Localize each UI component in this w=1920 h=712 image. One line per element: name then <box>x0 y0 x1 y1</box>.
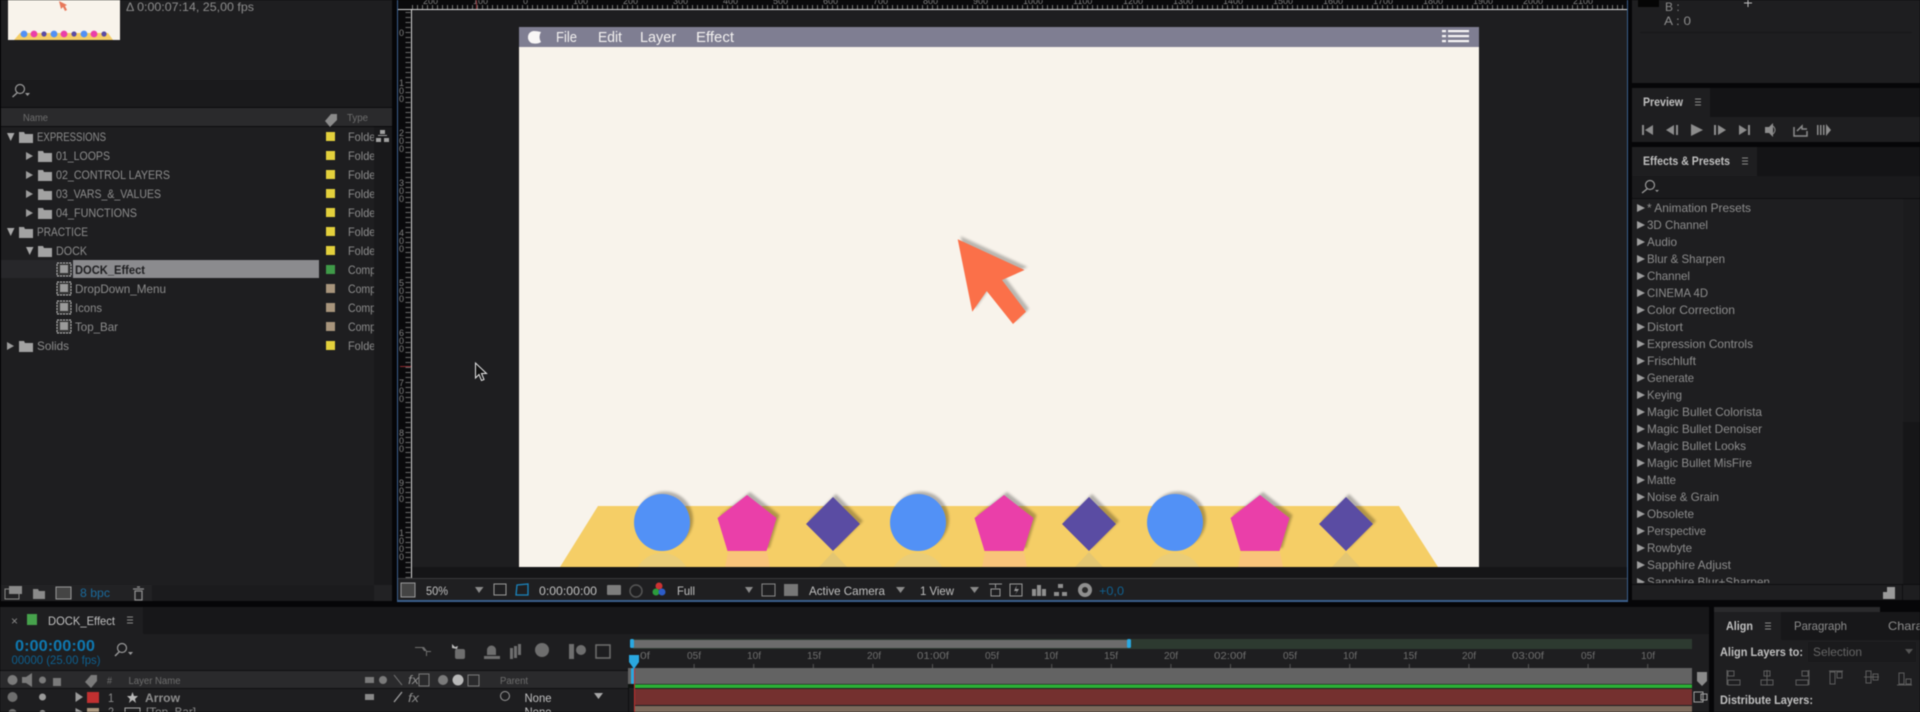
time ruler: 20f <box>867 651 881 662</box>
project item list: Solids <box>37 339 69 353</box>
project item list: EXPRESSIONS <box>37 130 106 144</box>
left ruler: 2 <box>399 128 404 138</box>
timeline tab row: × <box>11 614 18 628</box>
type column: Folder <box>348 206 379 220</box>
timeline tab row <box>11 607 1709 634</box>
project item list: DropDown_Menu <box>75 282 166 296</box>
left ruler <box>398 10 412 578</box>
panel: effects and presets: Effects & Presets <box>1643 154 1730 168</box>
left ruler: 0 <box>399 444 404 454</box>
timeline right icons <box>1694 672 1707 702</box>
panel: align: Distribute Layers: <box>1720 693 1813 707</box>
project item list: Top_Bar <box>75 320 118 334</box>
type column: Folder <box>348 244 379 258</box>
comp duration: Δ 0:00:07:14, 25,00 fps <box>126 0 254 14</box>
layer 1: Arrow: fx <box>408 691 420 705</box>
icon: circle 3 <box>1147 494 1203 551</box>
comp canvas <box>519 27 1479 609</box>
time ruler: 10f <box>1343 651 1357 662</box>
layer bars <box>628 668 1692 712</box>
type column: Folder <box>348 149 379 163</box>
column header: Name <box>23 113 48 124</box>
effects list: Perspective <box>1647 524 1706 538</box>
comp thumbnail <box>8 0 120 40</box>
left ruler: 9 <box>399 478 404 488</box>
icon: mouse cursor <box>476 363 486 380</box>
scrollbar <box>1903 199 1920 584</box>
panel: align: Selection <box>1813 645 1862 659</box>
effects list: * Animation Presets <box>1647 201 1751 215</box>
label colour swatches <box>326 132 335 350</box>
type column: Comp <box>348 263 376 277</box>
search bar <box>1 80 392 107</box>
left ruler: 7 <box>399 378 404 388</box>
reflections <box>638 552 1359 567</box>
timeline search <box>115 644 133 656</box>
left ruler: 0 <box>399 486 404 496</box>
left ruler: 1 <box>399 78 404 88</box>
effects footer <box>1632 584 1920 600</box>
left ruler: 0 <box>399 236 404 246</box>
left ruler: 0 <box>399 28 404 38</box>
panel: preview <box>1632 88 1920 142</box>
timeline switches <box>415 643 610 659</box>
align icons <box>1727 670 1912 685</box>
project footer: 8 bpc <box>80 586 110 600</box>
left ruler: 5 <box>399 278 404 288</box>
layer column header: Parent <box>500 676 528 687</box>
icon: pentagon 2 <box>974 495 1034 551</box>
effects list: Magic Bullet Colorista <box>1647 405 1762 419</box>
icon: diamond 3 <box>1319 497 1373 551</box>
time ruler: 15f <box>1403 651 1417 662</box>
time ruler: 05f <box>985 651 999 662</box>
project footer <box>1 585 392 601</box>
left ruler: 0 <box>399 552 404 562</box>
left ruler: 3 <box>399 178 404 188</box>
current time <box>12 638 100 667</box>
column header <box>1 107 392 127</box>
project item list <box>7 130 170 353</box>
left ruler: 8 <box>399 428 404 438</box>
type column: Folder <box>348 225 379 239</box>
viewer toolbar: 1 View <box>920 584 954 598</box>
effects list: Keying <box>1647 388 1682 402</box>
time ruler: 20f <box>1164 651 1178 662</box>
effects list: Obsolete <box>1647 507 1694 521</box>
time ruler: 02:00f <box>1214 651 1246 662</box>
effects list: CINEMA 4D <box>1647 286 1708 300</box>
layer column header <box>0 670 628 689</box>
time ruler: 15f <box>1104 651 1118 662</box>
layer 2: Top_Bar <box>8 705 552 712</box>
time ruler: 10f <box>1044 651 1058 662</box>
left ruler: 4 <box>399 228 404 238</box>
panel: timeline <box>0 607 1709 712</box>
left ruler: 0 <box>399 294 404 304</box>
column header: Type <box>347 113 368 124</box>
project item list: Icons <box>75 301 102 315</box>
time ruler: 15f <box>807 651 821 662</box>
time ruler: 03:00f <box>1512 651 1544 662</box>
effects list: Color Correction <box>1647 303 1735 317</box>
dock shadows <box>637 492 1376 548</box>
selected row highlight <box>1 260 319 278</box>
effects list: Magic Bullet MisFire <box>1647 456 1752 470</box>
viewer toolbar <box>398 578 1627 600</box>
left ruler: 0 <box>399 286 404 296</box>
effects list: Sapphire Adjust <box>1647 558 1732 572</box>
panel: info: A : 0 <box>1664 14 1691 28</box>
arrow pointer <box>958 236 1029 324</box>
effects list: Sapphire Blur+Sharpen <box>1647 575 1770 589</box>
layer column header: fx <box>408 673 420 687</box>
icon: menu lines <box>1442 30 1469 42</box>
left ruler: 0 <box>399 136 404 146</box>
project item list: 04_FUNCTIONS <box>56 206 137 220</box>
viewer toolbar: +0,0 <box>1099 584 1124 598</box>
panel: info: B : <box>1665 0 1680 14</box>
panel: align <box>1714 607 1920 712</box>
effects list: Rowbyte <box>1647 541 1692 555</box>
type column: Comp <box>348 301 376 315</box>
panel: info <box>1632 0 1920 83</box>
layer column header: Layer Name <box>128 676 181 687</box>
left ruler: 0 <box>399 144 404 154</box>
time ruler: 05f <box>1581 651 1595 662</box>
time ruler <box>634 651 1692 666</box>
panel: align: Paragraph <box>1794 619 1847 633</box>
layer 1: Arrow: None <box>524 691 552 705</box>
playhead <box>629 655 639 712</box>
effects list: Magic Bullet Looks <box>1647 439 1746 453</box>
left ruler: 0 <box>399 494 404 504</box>
current time: 0:00:00:00 <box>15 638 95 655</box>
effects list: Expression Controls <box>1647 337 1753 351</box>
project item list: 02_CONTROL LAYERS <box>56 168 170 182</box>
strip below canvas <box>412 567 1627 578</box>
panel: align: Align <box>1726 619 1753 633</box>
type column: Folder <box>348 187 379 201</box>
panel: project <box>1 0 392 601</box>
panel: align: Align Layers to: <box>1720 645 1803 659</box>
effects list: Distort <box>1647 320 1684 334</box>
effects list: 3D Channel <box>1647 218 1708 232</box>
left ruler: 0 <box>399 186 404 196</box>
effects list: Noise & Grain <box>1647 490 1719 504</box>
left ruler: 0 <box>399 536 404 546</box>
dock icons row <box>634 494 1373 551</box>
left ruler: 0 <box>399 544 404 554</box>
left ruler: 0 <box>399 94 404 104</box>
left ruler: 0 <box>399 194 404 204</box>
layer 1: Arrow: Arrow <box>145 691 181 705</box>
project item list: DOCK_Effect <box>75 263 145 277</box>
left ruler: 0 <box>399 386 404 396</box>
left ruler: 0 <box>399 436 404 446</box>
time ruler: 05f <box>1283 651 1297 662</box>
left ruler: 0 <box>399 394 404 404</box>
menu bar: Effect <box>696 29 735 46</box>
menu bar: Edit <box>598 29 623 46</box>
type column: Comp <box>348 320 376 334</box>
icon: pentagon 1 <box>718 495 776 551</box>
viewer toolbar: Active Camera <box>809 584 885 598</box>
icon: circle 2 <box>890 494 946 551</box>
viewer toolbar: 50% <box>426 584 448 598</box>
left ruler: 0 <box>399 244 404 254</box>
effects list: Matte <box>1647 473 1676 487</box>
icon: diamond 2 <box>1062 497 1116 551</box>
effects list: Blur & Sharpen <box>1647 252 1725 266</box>
type column: Folder <box>348 130 379 144</box>
effects list: Audio <box>1647 235 1677 249</box>
icon: pentagon 3 <box>1230 495 1290 551</box>
current time: 00000 (25.00 fps) <box>12 653 100 667</box>
viewer toolbar: Full <box>677 584 695 598</box>
panel: effects and presets <box>1632 147 1920 600</box>
menu bar <box>519 27 1479 47</box>
project item list: DOCK <box>56 244 87 258</box>
time ruler: 0f <box>640 651 650 662</box>
icon: apple logo <box>528 31 541 44</box>
panel: preview: Preview <box>1643 95 1684 109</box>
time ruler: 01:00f <box>917 651 949 662</box>
time ruler: 20f <box>1462 651 1476 662</box>
timeline tab row: DOCK_Effect <box>48 614 116 628</box>
dock tray <box>560 506 1438 567</box>
menu bar: File <box>556 29 577 46</box>
left ruler: 0 <box>399 336 404 346</box>
time ruler: 05f <box>687 651 701 662</box>
type column: Comp <box>348 282 376 296</box>
icon: diamond 1 <box>806 497 860 551</box>
type column: Folder <box>348 339 379 353</box>
effects list: Channel <box>1647 269 1690 283</box>
left ruler: 1 <box>399 528 404 538</box>
playback controls <box>1642 123 1831 137</box>
layer column header: # <box>107 676 112 687</box>
time navigator <box>630 639 1692 649</box>
layer 1: Arrow: 1 <box>108 691 114 705</box>
effects list: Frischluft <box>1647 354 1697 368</box>
panel: composition viewer <box>397 0 1628 609</box>
top ruler <box>398 0 1627 10</box>
effects list <box>1637 201 1770 589</box>
layer 1: Arrow <box>8 691 603 705</box>
left ruler: 6 <box>399 328 404 338</box>
icon: flowchart <box>376 130 389 142</box>
effects list: Magic Bullet Denoiser <box>1647 422 1762 436</box>
viewer toolbar: 0:00:00:00 <box>539 584 597 598</box>
time ruler: 10f <box>747 651 761 662</box>
type column <box>348 130 379 353</box>
left ruler: 0 <box>399 86 404 96</box>
icon: circle 1 <box>634 494 690 551</box>
time ruler: 10f <box>1641 651 1655 662</box>
menu bar: Layer <box>640 29 676 46</box>
project item list: 03_VARS_&_VALUES <box>56 187 161 201</box>
search bar <box>1632 176 1920 199</box>
project item list: PRACTICE <box>37 225 88 239</box>
project item list: 01_LOOPS <box>56 149 110 163</box>
effects list: Generate <box>1647 371 1694 385</box>
left ruler: 0 <box>399 344 404 354</box>
type column: Folder <box>348 168 379 182</box>
